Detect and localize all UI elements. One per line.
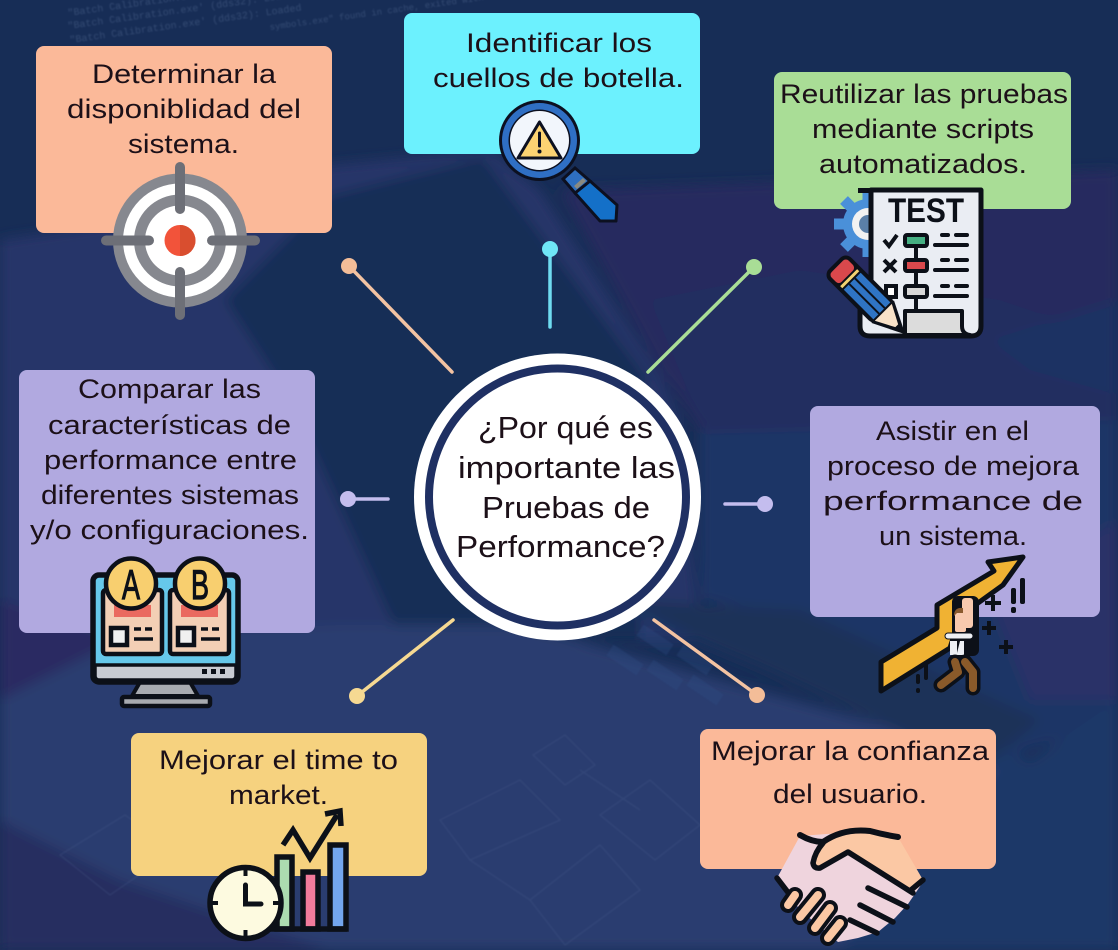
icon: clock and bar chart xyxy=(210,811,347,938)
icon: A/B monitor xyxy=(93,558,238,706)
icon: person pushing arrow xyxy=(881,557,1025,693)
text: confianza usuario: Mejorar la confianza xyxy=(711,736,990,766)
text: comparar características: características de xyxy=(48,410,291,440)
text: asistir mejora: Asistir en el xyxy=(876,416,1029,446)
panel: central question xyxy=(414,354,701,640)
text: asistir mejora xyxy=(823,416,1083,551)
heading: central question text xyxy=(456,410,675,564)
text: disponibilidad: sistema. xyxy=(128,129,239,159)
background: blurred laptop photo: "Batch Calibration.exe' (dds32): Loaded xyxy=(69,3,302,47)
text: reutilizar pruebas: automatizados. xyxy=(819,149,1027,179)
icon: A/B monitor: A xyxy=(122,561,140,608)
icon: magnifier warning xyxy=(499,100,617,221)
text: asistir mejora: proceso de mejora xyxy=(827,451,1080,481)
icon: test document xyxy=(823,188,981,346)
text: asistir mejora: performance de xyxy=(823,486,1083,516)
icon: A/B monitor: B xyxy=(191,561,209,608)
panel: asistir mejora xyxy=(810,406,1100,693)
connector: yellow bottom-left xyxy=(349,620,453,704)
text: cuellos de botella xyxy=(433,28,684,93)
panel: comparar características xyxy=(19,370,315,706)
connector: cyan top xyxy=(542,241,558,327)
text: asistir mejora: un sistema. xyxy=(879,521,1027,551)
text: disponibilidad: disponiblidad del xyxy=(67,94,301,124)
text: time to market: Mejorar el time to xyxy=(159,745,398,775)
text: cuellos de botella: cuellos de botella. xyxy=(433,63,684,93)
panel: time to market xyxy=(131,733,427,938)
icon: target xyxy=(106,167,255,315)
text: confianza usuario: del usuario. xyxy=(773,779,927,809)
heading: central question text: importante las xyxy=(458,450,675,485)
icon: handshake xyxy=(777,830,923,942)
connector: peach bottom-right xyxy=(654,620,765,703)
text: reutilizar pruebas: mediante scripts xyxy=(812,114,1034,144)
heading: central question text: Performance? xyxy=(456,529,665,564)
text: reutilizar pruebas xyxy=(780,79,1068,179)
text: comparar características xyxy=(30,374,309,545)
text: disponibilidad: Determinar la xyxy=(92,59,277,89)
panel: cuellos de botella xyxy=(404,13,700,221)
connector: peach top-left xyxy=(341,258,452,372)
heading: central question text: ¿Por qué es xyxy=(478,410,653,445)
text: reutilizar pruebas: Reutilizar las pruebas xyxy=(780,79,1068,109)
text: disponibilidad xyxy=(67,59,301,159)
panel: reutilizar pruebas xyxy=(774,72,1071,346)
connector: green top-right xyxy=(648,259,762,372)
text: cuellos de botella: Identificar los xyxy=(466,28,652,58)
text: confianza usuario xyxy=(711,736,990,809)
icon: test document: TEST xyxy=(888,192,964,230)
text: time to market: market. xyxy=(229,780,328,810)
text: comparar características: y/o configuraciones. xyxy=(30,515,309,545)
text: comparar características: Comparar las xyxy=(78,374,261,404)
text: comparar características: performance entre xyxy=(44,445,297,475)
text: time to market xyxy=(159,745,398,810)
panel: disponibilidad xyxy=(36,46,332,315)
text: comparar características: diferentes sistemas xyxy=(41,480,299,510)
heading: central question text: Pruebas de xyxy=(482,490,650,525)
connector: lavender right xyxy=(725,496,773,512)
panel: confianza usuario xyxy=(700,729,996,942)
connector: lavender left xyxy=(340,491,388,507)
